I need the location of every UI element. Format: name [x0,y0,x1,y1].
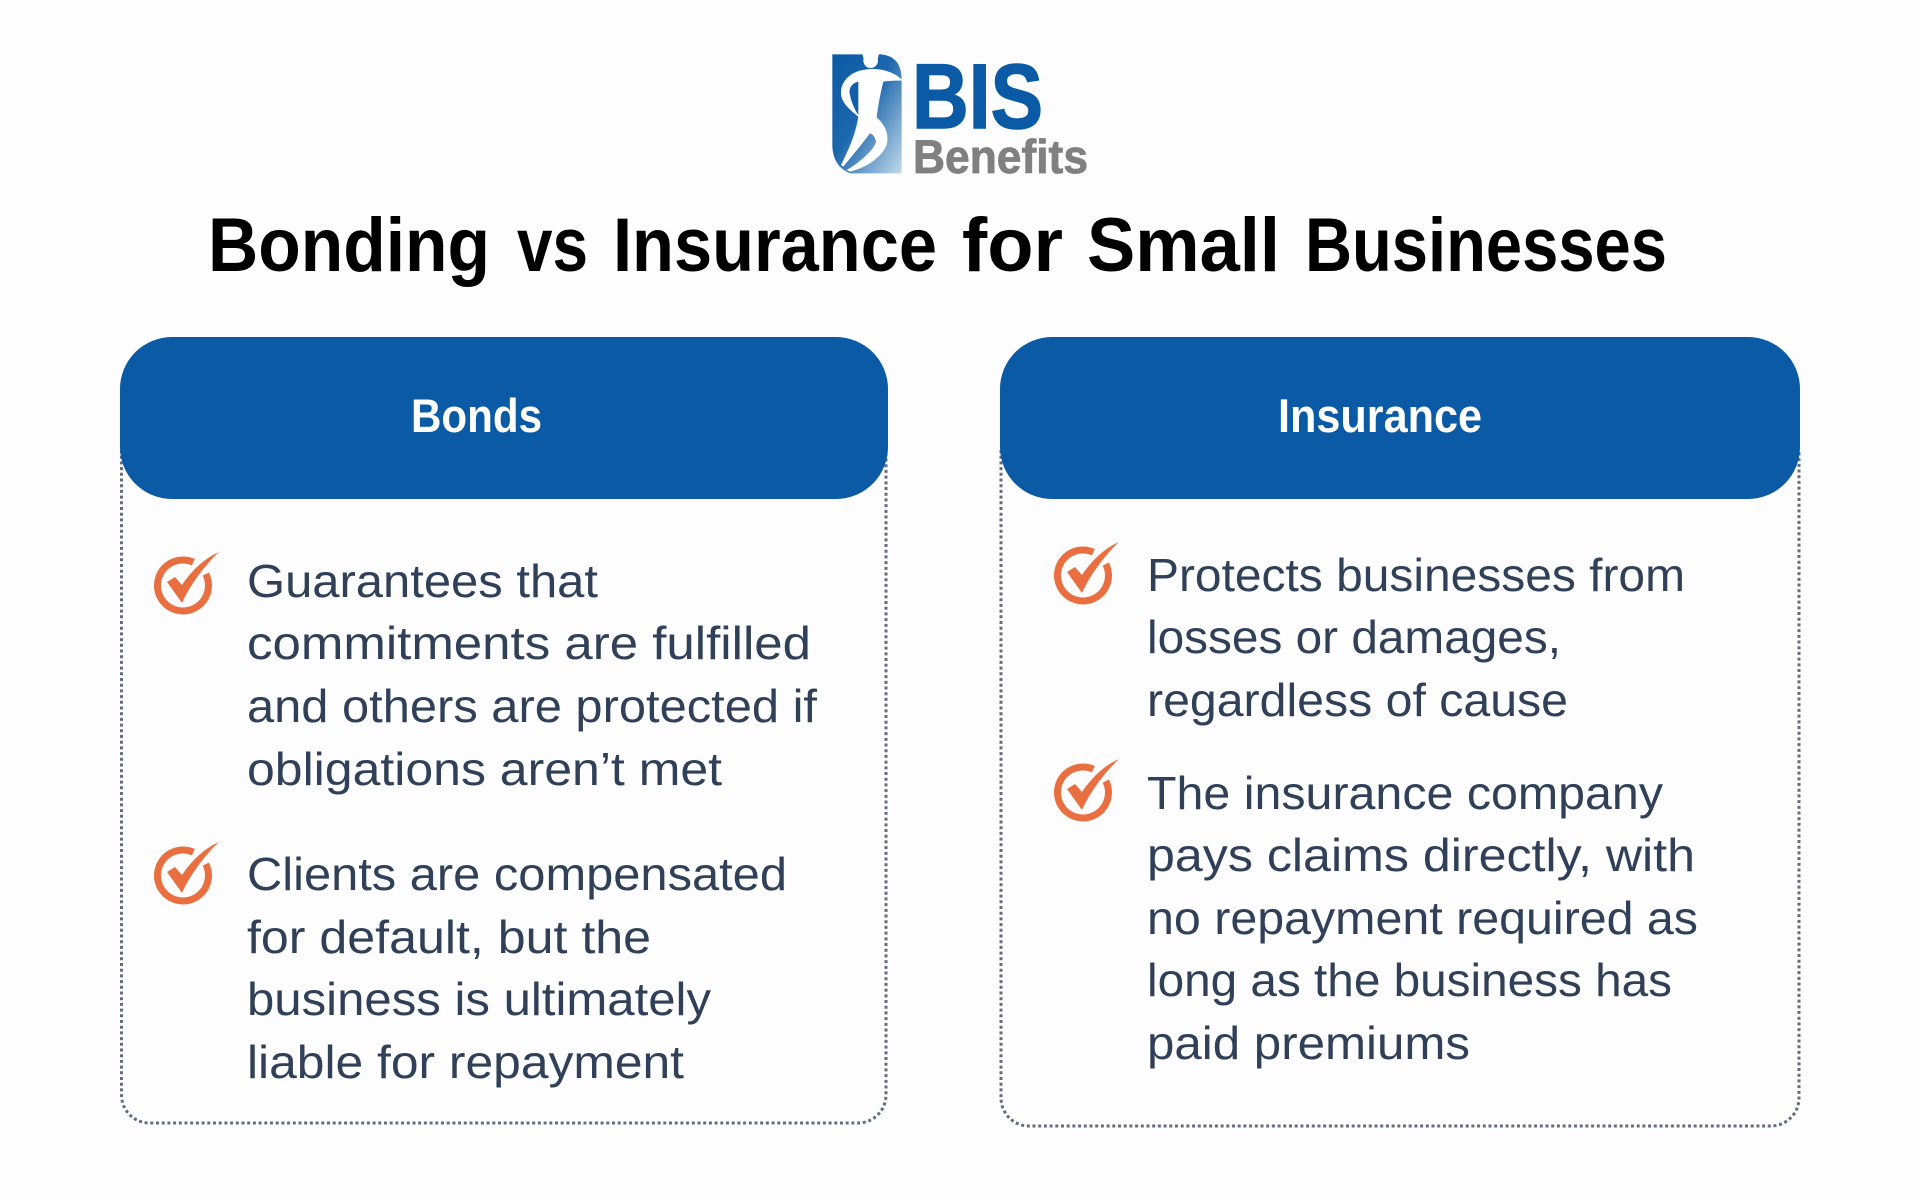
bullet: clients: for default, but the [247,911,651,963]
bullet: insurance company: long as the business has [1147,954,1672,1006]
header: insurance [1000,337,1800,499]
icon: check [157,842,219,901]
panel outline [122,450,886,1123]
bullet: insurance company [1147,767,1698,1069]
bullet: guarantees: obligations aren’t met [247,743,722,795]
icon: check [157,552,219,611]
title: Businesses [1305,203,1667,288]
bullet: insurance company: paid premiums [1147,1017,1470,1069]
bullet: protects: losses or damages, [1147,611,1561,663]
title: Bonding [208,203,490,288]
bullet: clients [247,848,787,1088]
bullet: protects: regardless of cause [1147,674,1568,726]
header: insurance: Insurance [1278,389,1482,442]
bullet: guarantees: Guarantees that [247,555,598,607]
icon: shield with runner [832,53,902,173]
bullet: guarantees: and others are protected if [247,680,817,732]
logo: BIS Benefits [832,46,1088,183]
panel: insurance [1000,337,1800,1126]
icon: check [1057,542,1119,601]
header: bonds: Bonds [411,389,542,442]
icon: check [1057,759,1119,818]
bullet: clients: liable for repayment [247,1036,684,1088]
logo wordmark BIS: BIS [912,46,1043,148]
logo wordmark Benefits: Benefits [913,130,1088,183]
title [208,203,1667,288]
title: for [962,203,1063,288]
bullet: guarantees [247,555,817,795]
panel outline [1001,450,1799,1126]
bullet: protects: Protects businesses from [1147,549,1685,601]
bullet: clients: Clients are compensated [247,848,787,900]
bullet: insurance company: The insurance company [1147,767,1664,819]
title: vs [517,203,588,288]
title: Insurance [613,203,937,288]
panel: bonds [120,337,888,1123]
bullet: insurance company: no repayment required as [1147,892,1698,944]
bullet: guarantees: commitments are fulfilled [247,617,811,669]
bullet: insurance company: pays claims directly, with [1147,829,1695,881]
bullet: protects [1147,549,1685,726]
bullet: clients: business is ultimately [247,973,712,1025]
title: Small [1087,203,1280,288]
header: bonds [120,337,888,499]
